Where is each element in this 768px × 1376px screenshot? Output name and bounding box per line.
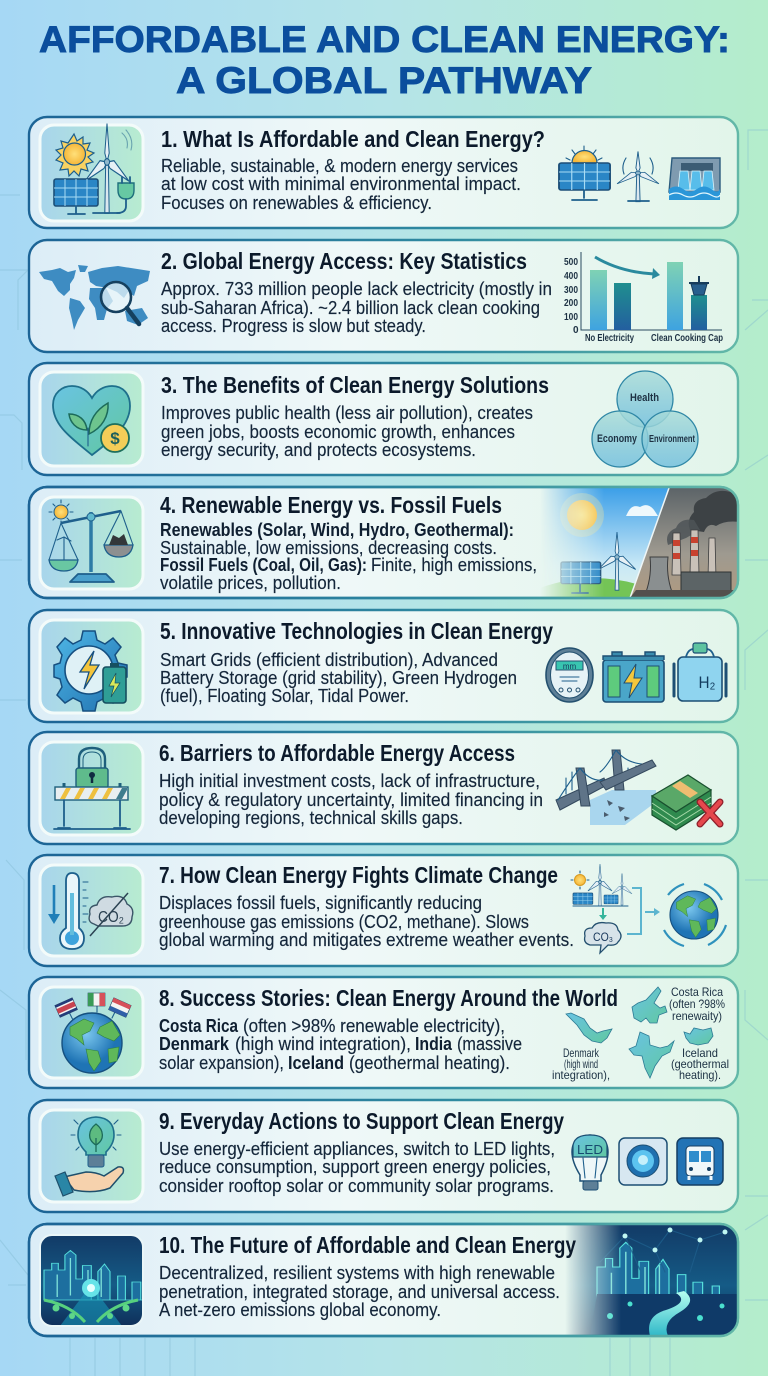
trend arrow — [595, 257, 654, 274]
map label: iceland — [671, 1046, 729, 1082]
icon: smart thermostat — [619, 1138, 667, 1185]
chart axis labels: 100 — [564, 312, 578, 323]
body text: Use energy-efficient appliances, switch to LED lights, — [159, 1138, 555, 1159]
bar chart — [564, 252, 723, 344]
scene: clean versus polluted landscape — [540, 488, 740, 598]
chart axis labels — [564, 257, 579, 336]
heading: 1. What Is Affordable and Clean Energy? — [161, 126, 545, 152]
icon: heart with leaf and coin — [40, 372, 143, 466]
map label: denmark — [552, 1046, 610, 1082]
body text — [159, 1015, 522, 1073]
panel: 9 everyday actions — [29, 1100, 738, 1212]
map: iceland shape — [684, 1028, 713, 1045]
panel: 2 global energy access — [29, 240, 738, 352]
heading: 8. Success Stories: Clean Energy Around the World — [159, 985, 618, 1011]
heading: 6. Barriers to Affordable Energy Access — [159, 740, 515, 766]
title: A GLOBAL PATHWAY — [176, 60, 592, 101]
body text: (high wind integration), — [235, 1033, 411, 1054]
body text — [161, 155, 521, 213]
body text — [159, 1138, 555, 1196]
body text: (often >98% renewable electricity), — [243, 1015, 505, 1036]
map label: costa rica: renewaity) — [672, 1009, 722, 1023]
chart category labels: Clean Cooking Cap — [651, 333, 723, 344]
body text: access. Progress is slow but steady. — [161, 315, 426, 336]
icon: world map with magnifier — [39, 265, 150, 330]
body text — [161, 278, 552, 336]
chart bars — [590, 262, 707, 330]
icon: cooking pot — [689, 276, 709, 295]
body text: Approx. 733 million people lack electricity (mostly in — [161, 278, 552, 299]
icon: hydrogen tank — [674, 643, 726, 701]
heading: 4. Renewable Energy vs. Fossil Fuels — [160, 492, 502, 518]
icon: light bulb over hand — [40, 1110, 143, 1202]
body text — [159, 770, 543, 828]
chart category labels — [585, 333, 723, 344]
body text: volatile prices, pollution. — [160, 572, 341, 593]
icon: smart meter — [546, 648, 593, 702]
body text: greenhouse gas emissions (CO2, methane). Slows — [159, 911, 529, 932]
icon: wind turbine — [617, 151, 659, 202]
icon: smart meter: mm — [563, 662, 576, 671]
map: denmark shape — [632, 987, 667, 1023]
body text: Iceland — [288, 1052, 344, 1073]
chart axis labels: 400 — [564, 271, 578, 282]
body text — [159, 892, 574, 950]
chart category labels: No Electricity — [585, 333, 634, 344]
body text: Renewables (Solar, Wind, Hydro, Geothermal): — [160, 519, 514, 540]
body text: developing regions, technical skills gaps. — [159, 807, 463, 828]
venn diagram: Health — [630, 392, 659, 404]
body text: (geothermal heating). — [349, 1052, 510, 1073]
map label: denmark: Denmark — [563, 1046, 600, 1060]
diagram: clean energy reduces CO2 and protects the globe: CO₃ — [593, 930, 613, 944]
body text: Displaces fossil fuels, significantly reducing — [159, 892, 482, 913]
diagram: clean energy reduces CO2 and protects the globe — [571, 864, 726, 953]
body text: at low cost with minimal environmental impact. — [161, 173, 521, 194]
icon: thermometer and crossed CO2 cloud — [40, 865, 143, 956]
icon: money with red cross — [652, 775, 720, 830]
icon: battery storage — [603, 652, 664, 702]
body text: Battery Storage (grid stability), Green Hydrogen — [160, 667, 517, 688]
map: india shape — [629, 1032, 674, 1078]
body text: Improves public health (less air pollution), creates — [161, 402, 533, 423]
panel: 10 the future — [29, 1224, 740, 1336]
panel: 5 innovative technologies — [29, 610, 738, 722]
icon: heart with leaf and coin: $ — [110, 429, 120, 448]
icon: LED bulb: LED — [577, 1142, 603, 1157]
panel: 1 what is affordable and clean energy — [29, 117, 738, 228]
body text: consider rooftop solar or community solar programs. — [159, 1175, 554, 1196]
body text: Costa Rica — [159, 1015, 239, 1036]
body text: Sustainable, low emissions, decreasing costs. — [160, 537, 497, 558]
icon: balance scales — [40, 497, 143, 589]
panel: 6 barriers — [29, 732, 738, 844]
chart axis labels: 500 — [564, 257, 578, 268]
heading: 5. Innovative Technologies in Clean Energy — [160, 618, 553, 644]
map: mexico shape — [566, 1013, 612, 1043]
map label: denmark: integration), — [552, 1068, 610, 1082]
venn diagram: Environment — [649, 434, 695, 445]
body text: India — [415, 1033, 453, 1054]
body text: A net-zero emissions global economy. — [159, 1299, 441, 1320]
body text: High initial investment costs, lack of infrastructure, — [159, 770, 540, 791]
icon: solar panel — [559, 146, 610, 200]
heading: 10. The Future of Affordable and Clean Energy — [159, 1232, 576, 1258]
body text: Fossil Fuels (Coal, Oil, Gas): — [160, 554, 367, 575]
panel: 3 benefits — [29, 363, 738, 475]
chart axis labels: 0 — [573, 325, 579, 336]
body text: policy & regulatory uncertainty, limited financing in — [159, 789, 543, 810]
body text: Denmark — [159, 1033, 230, 1054]
panel: 7 climate change — [29, 855, 738, 966]
map label: iceland: Iceland — [682, 1046, 718, 1060]
map label: costa rica — [669, 985, 725, 1023]
icon: bus — [677, 1138, 723, 1185]
body text: Finite, high emissions, — [371, 554, 537, 575]
body text: green jobs, boosts economic growth, enhances — [161, 421, 515, 442]
map label: iceland: heating). — [679, 1068, 721, 1082]
icon: hydrogen tank: H₂ — [698, 673, 716, 692]
icon: globe with flags — [40, 987, 143, 1078]
heading: 7. How Clean Energy Fights Climate Change — [159, 862, 558, 888]
map label: costa rica: (often ?98% — [669, 997, 725, 1011]
body text: Focuses on renewables & efficiency. — [161, 192, 432, 213]
body text: global warming and mitigates extreme weather events. — [159, 929, 574, 950]
icon: LED bulb — [572, 1135, 608, 1190]
body text: energy security, and protects ecosystems. — [161, 439, 476, 460]
chart axis labels: 200 — [564, 298, 578, 309]
panel: 4 renewable vs fossil — [29, 487, 740, 598]
title — [39, 19, 730, 101]
icon: sun, wind turbine, solar panel and plug — [40, 124, 143, 221]
body text: (massive — [457, 1033, 522, 1054]
chart axis labels: 300 — [564, 285, 578, 296]
body text — [160, 649, 517, 706]
icon: digital city — [40, 1235, 156, 1326]
body text: solar expansion), — [159, 1052, 284, 1073]
venn diagram: Economy — [597, 433, 638, 445]
body text — [159, 1262, 560, 1320]
icon: gear with lightning and battery — [40, 620, 143, 713]
scene: futuristic smart city — [565, 1224, 740, 1336]
icon: broken bridge — [556, 750, 656, 825]
map label: denmark: (high wind — [564, 1057, 598, 1071]
icon: thermometer and crossed CO2 cloud: CO₂ — [98, 909, 124, 926]
body text — [160, 519, 537, 593]
venn diagram — [592, 371, 698, 467]
body text: penetration, integrated storage, and universal access. — [159, 1281, 560, 1302]
heading: 3. The Benefits of Clean Energy Solutions — [161, 372, 549, 398]
icon: hydro dam — [669, 158, 720, 200]
icon: padlock and barrier — [40, 742, 143, 835]
body text: Smart Grids (efficient distribution), Advanced — [160, 649, 498, 670]
body text — [161, 402, 533, 460]
body text: Reliable, sustainable, & modern energy services — [161, 155, 518, 176]
title: AFFORDABLE AND CLEAN ENERGY: — [39, 19, 730, 60]
body text: reduce consumption, support green energy policies, — [159, 1156, 551, 1177]
map label: iceland: (geothermal — [671, 1057, 729, 1071]
body text: Decentralized, resilient systems with high renewable — [159, 1262, 555, 1283]
heading: 9. Everyday Actions to Support Clean Energy — [159, 1108, 564, 1134]
panel: 8 success stories — [29, 977, 738, 1088]
map label: costa rica: Costa Rica — [671, 985, 723, 999]
body text: (fuel), Floating Solar, Tidal Power. — [160, 685, 409, 706]
heading: 2. Global Energy Access: Key Statistics — [161, 248, 527, 274]
body text: sub-Saharan Africa). ~2.4 billion lack clean cooking — [161, 297, 540, 318]
